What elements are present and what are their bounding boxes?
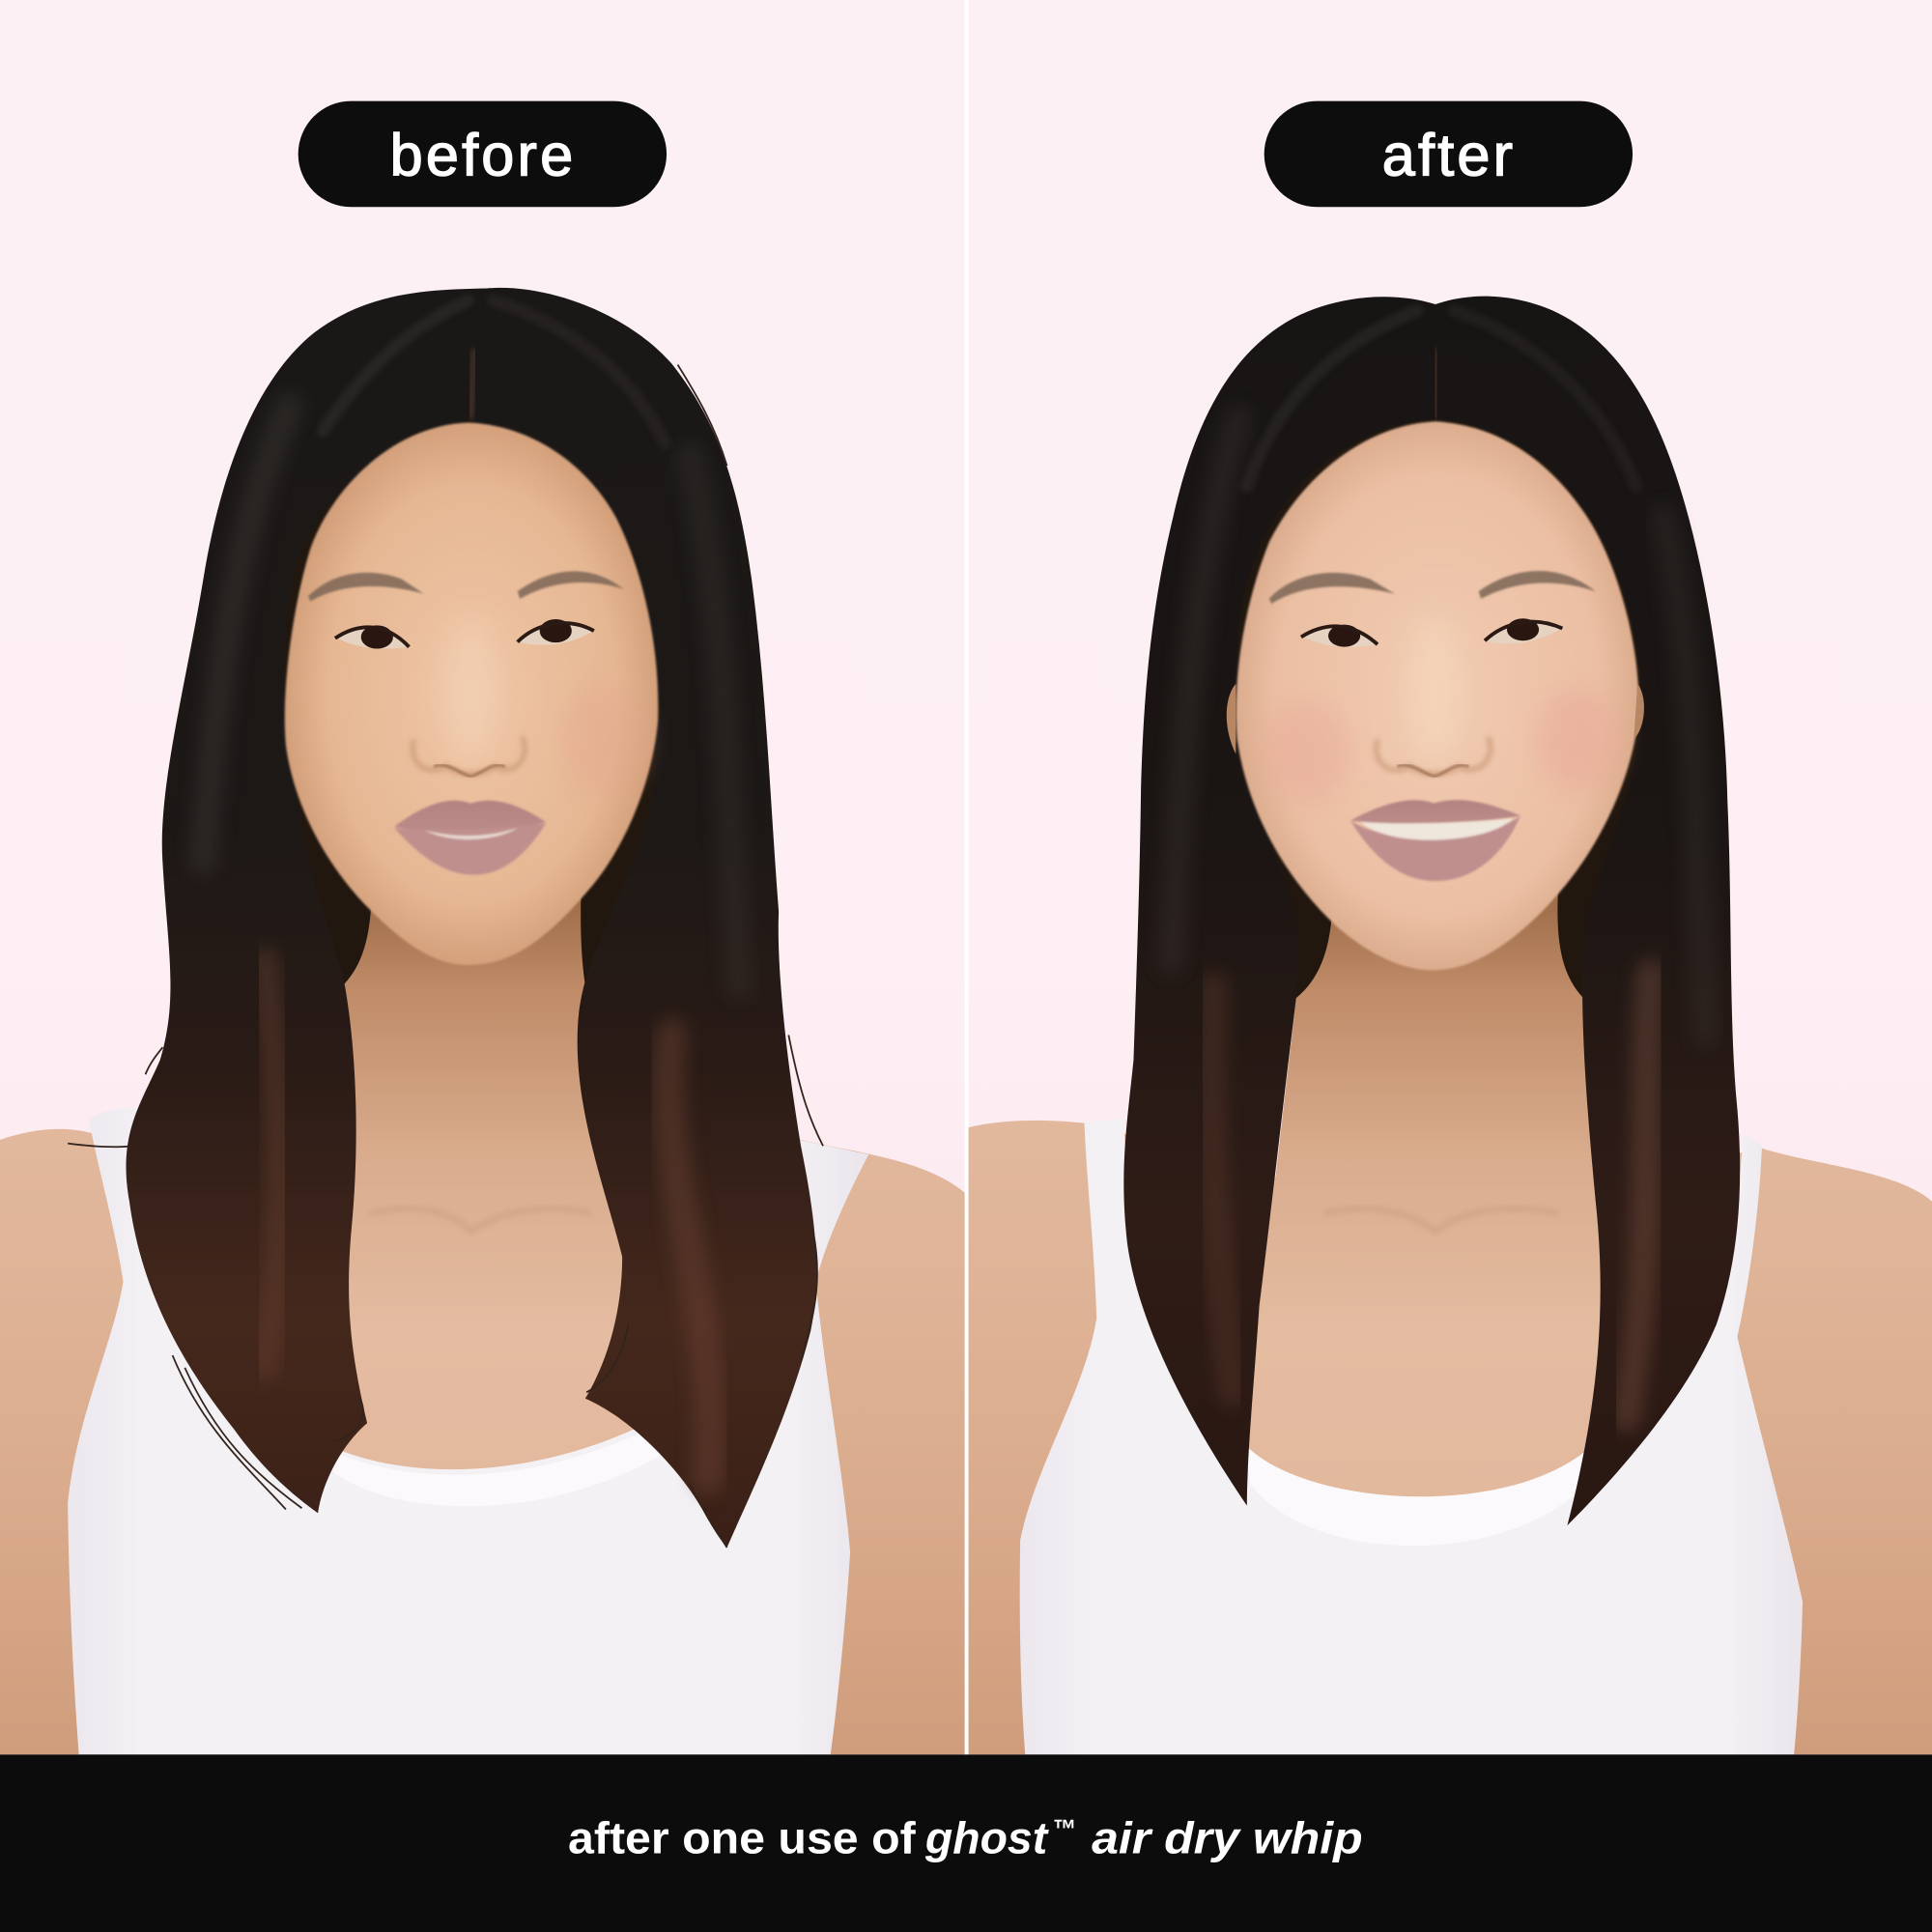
caption: product name: ghost	[924, 1812, 1049, 1862]
caption: plain part: after one use of	[568, 1812, 916, 1862]
nose: after	[1377, 616, 1491, 777]
left brow: before	[308, 573, 424, 601]
pill label: before: before	[390, 123, 576, 188]
panel: before photo	[0, 0, 965, 1754]
cheek blush: before	[580, 711, 659, 781]
right ear: after	[1634, 684, 1644, 739]
panel background: before	[0, 0, 964, 1192]
tank top neckline band: before	[318, 1423, 663, 1506]
left eye: after	[1301, 625, 1378, 647]
hair shadow at parting: after	[1397, 419, 1473, 425]
neck and chest: after	[1249, 893, 1600, 1496]
collarbone shading: after	[1324, 1208, 1559, 1233]
lips and smile: after	[1350, 800, 1520, 881]
tank top neckline band: after	[1248, 1449, 1584, 1505]
left brow: after	[1269, 573, 1395, 604]
hair shadow behind face: after	[1233, 425, 1645, 998]
pill label: before	[298, 101, 667, 207]
right brow: after	[1479, 571, 1596, 599]
caption: product type: air dry whip	[1092, 1812, 1363, 1862]
face: before	[285, 423, 658, 965]
white tank top: before	[68, 1108, 868, 1754]
pill label: after: after	[1382, 123, 1516, 188]
cheek blush left: after	[1273, 707, 1345, 792]
hair: after	[1123, 297, 1740, 1525]
collarbone shading: before	[370, 1208, 591, 1233]
panel: after photo	[969, 0, 1932, 1754]
panel background: after	[968, 0, 1932, 1202]
hair highlights: after	[1171, 310, 1707, 1417]
shoulders and arms: before	[0, 1129, 965, 1754]
left eye: before	[335, 625, 409, 649]
right eye: before	[518, 619, 594, 645]
left ear: after	[1227, 684, 1236, 754]
hair: before	[126, 288, 816, 1548]
shoulders and arms: after	[969, 1121, 1932, 1754]
white tank top: after	[1020, 1119, 1803, 1754]
right eye: after	[1485, 618, 1562, 643]
nose: before	[412, 616, 525, 777]
neck and chest: before	[343, 896, 634, 1469]
pill label: after	[1264, 101, 1633, 207]
caption: trademark: ™	[1052, 1814, 1076, 1844]
cheek blush right: after	[1540, 694, 1607, 782]
right brow: before	[518, 571, 623, 599]
flyaway hairs: before	[68, 365, 823, 1548]
hair shadow behind face: before	[281, 407, 666, 998]
lips: before	[394, 801, 546, 875]
caption bar	[0, 1754, 1932, 1932]
hair highlights: before	[203, 300, 739, 1479]
face: after	[1236, 421, 1639, 970]
